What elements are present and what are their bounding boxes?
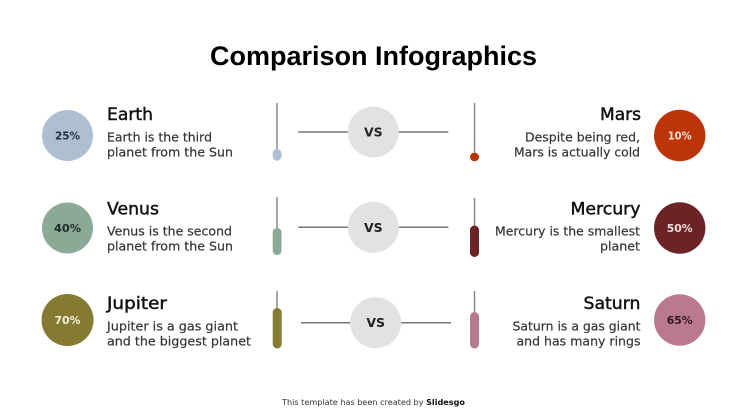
gauge: Earth 25% bbox=[273, 103, 282, 161]
icon: Mercury percentage circle bbox=[654, 202, 705, 254]
icon: Venus percentage circle bbox=[42, 202, 93, 254]
icon: Earth percentage circle bbox=[42, 110, 93, 161]
panel: Mars bbox=[514, 105, 705, 161]
title: Comparison Infographics bbox=[210, 41, 537, 71]
gauge: Mercury 50% bbox=[470, 198, 479, 257]
comparison: VS row 3 bbox=[301, 297, 451, 348]
icon: Jupiter percentage circle bbox=[42, 294, 94, 346]
text: Mars description: Mars is actually cold bbox=[514, 146, 640, 160]
heading: Mercury: Mercury bbox=[570, 200, 641, 218]
text: Earth description: Earth is the third bbox=[107, 130, 212, 144]
heading: Venus: Venus bbox=[107, 200, 159, 218]
icon: Saturn percentage circle bbox=[654, 294, 705, 346]
text: Saturn description bbox=[512, 320, 641, 348]
text: Saturn description: and has many rings bbox=[516, 334, 640, 348]
icon: Saturn percentage circle: 65% bbox=[667, 314, 693, 327]
icon: Earth percentage circle: 25% bbox=[55, 130, 80, 142]
gauge: Jupiter 70% bbox=[273, 291, 282, 348]
icon: Jupiter percentage circle: 70% bbox=[54, 314, 80, 327]
panel: Jupiter bbox=[42, 294, 251, 348]
gauge: Saturn 65% bbox=[470, 291, 479, 348]
heading: Saturn: Saturn bbox=[584, 294, 640, 313]
text: Mercury description bbox=[495, 224, 640, 254]
panel: Venus bbox=[42, 200, 233, 254]
comparison: VS row 2: VS bbox=[364, 220, 383, 235]
heading: Jupiter: Jupiter bbox=[106, 294, 167, 313]
text: Mars description: Despite being red, bbox=[525, 130, 640, 144]
text: Venus description: Venus is the second bbox=[107, 224, 232, 238]
panel: Earth bbox=[42, 105, 233, 161]
text: Jupiter description: Jupiter is a gas giant bbox=[106, 320, 238, 334]
panel: Saturn bbox=[512, 294, 705, 348]
gauge: Venus 40% bbox=[273, 197, 282, 255]
footer credit: This template has been created by Slidesgo bbox=[281, 398, 465, 407]
comparison: VS row 2 bbox=[298, 202, 448, 253]
text: Mercury description: Mercury is the smallest bbox=[495, 224, 640, 238]
text: Mercury description: planet bbox=[600, 240, 640, 254]
gauge: Mars 10% bbox=[470, 103, 479, 161]
panel: Mercury bbox=[495, 200, 705, 254]
text: Venus description bbox=[107, 224, 233, 254]
text: Earth description: planet from the Sun bbox=[107, 146, 233, 160]
heading: Mars: Mars bbox=[600, 105, 641, 124]
text: Jupiter description: and the biggest planet bbox=[107, 334, 251, 348]
comparison: VS row 1: VS bbox=[364, 124, 383, 140]
icon: Mars percentage circle bbox=[654, 110, 705, 161]
heading: Earth: Earth bbox=[107, 105, 153, 124]
text: Earth description bbox=[107, 130, 233, 160]
text: Saturn description: Saturn is a gas giant bbox=[512, 320, 641, 334]
comparison: VS row 3: VS bbox=[366, 315, 385, 330]
icon: Venus percentage circle: 40% bbox=[54, 222, 81, 235]
text: Mars description bbox=[514, 130, 640, 160]
icon: Mars percentage circle: 10% bbox=[668, 130, 692, 142]
text: Venus description: planet from the Sun bbox=[107, 240, 233, 254]
comparison: VS row 1 bbox=[298, 106, 448, 158]
icon: Mercury percentage circle: 50% bbox=[667, 222, 693, 235]
text: Jupiter description bbox=[106, 320, 251, 348]
